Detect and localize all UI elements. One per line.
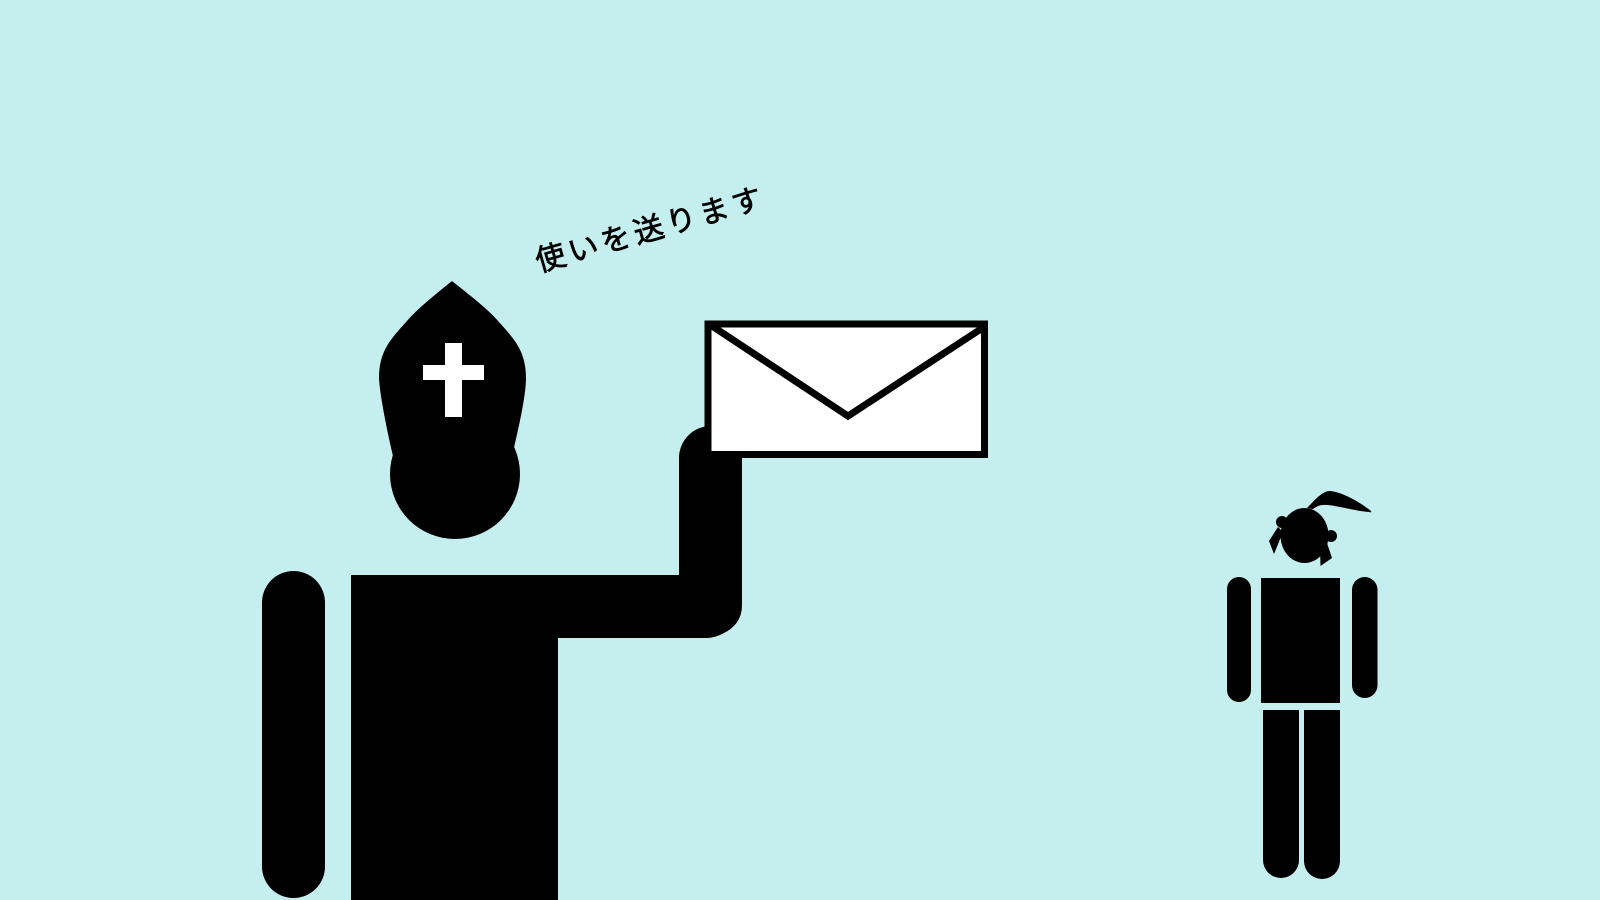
recipient torso: [1261, 578, 1340, 703]
recipient right leg: [1304, 710, 1340, 879]
caption: sending a messenger: 使いを送ります: [529, 173, 770, 281]
bishop head: [390, 409, 520, 539]
recipient head with headband: [1269, 491, 1371, 566]
bishop torso: [351, 575, 558, 900]
recipient right arm: [1352, 577, 1378, 698]
bishop lowered arm: [262, 571, 325, 898]
large figure: bishop holding envelope: [262, 281, 984, 900]
recipient left arm: [1227, 577, 1251, 702]
small figure: recipient with headband: [1227, 491, 1378, 879]
bishop mitre with cross: [379, 281, 526, 456]
recipient left leg: [1263, 710, 1299, 878]
bishop raised arm: [558, 426, 742, 638]
envelope: [708, 324, 984, 454]
